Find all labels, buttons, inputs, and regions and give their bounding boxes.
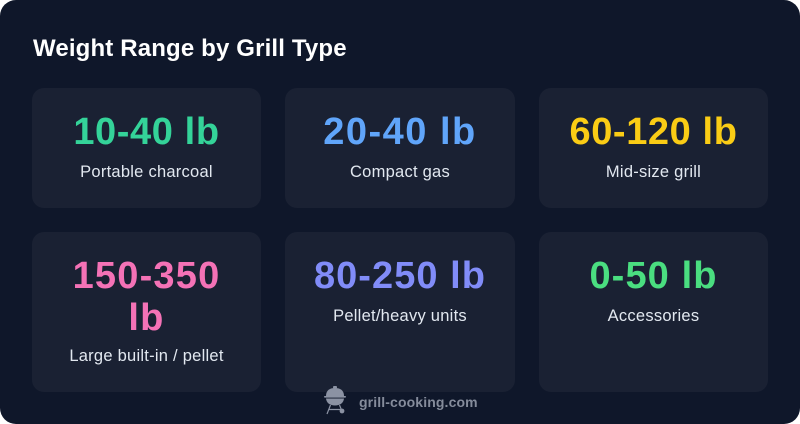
label: portable charcoal: Portable charcoal	[80, 163, 213, 181]
value: 60-120 lb: 60-120 lb	[569, 111, 738, 153]
title: Weight Range by Grill Type	[33, 35, 347, 62]
value: 20-40 lb: 20-40 lb	[323, 111, 477, 153]
card: large built-in / pellet	[32, 232, 261, 392]
label: accessories: Accessories	[608, 307, 699, 325]
card: pellet/heavy units	[285, 232, 515, 392]
card: accessories	[539, 232, 768, 392]
value: 150-350 lb: 150-350 lb	[73, 255, 220, 339]
card: compact gas	[285, 88, 515, 208]
watermark	[324, 386, 478, 414]
label: mid-size grill: Mid-size grill	[606, 163, 701, 181]
icon: kettle grill	[324, 386, 346, 414]
label: compact gas: Compact gas	[350, 163, 450, 181]
value: 80-250 lb: 80-250 lb	[314, 255, 486, 297]
watermark text: grill-cooking.com	[359, 394, 478, 410]
value: 0-50 lb: 0-50 lb	[589, 255, 718, 297]
label: large built-in / pellet: Large built-in / pellet	[69, 347, 224, 365]
label: pellet/heavy units: Pellet/heavy units	[333, 307, 467, 325]
value: 10-40 lb: 10-40 lb	[73, 111, 220, 153]
card: mid-size grill	[539, 88, 768, 208]
card: portable charcoal	[32, 88, 261, 208]
